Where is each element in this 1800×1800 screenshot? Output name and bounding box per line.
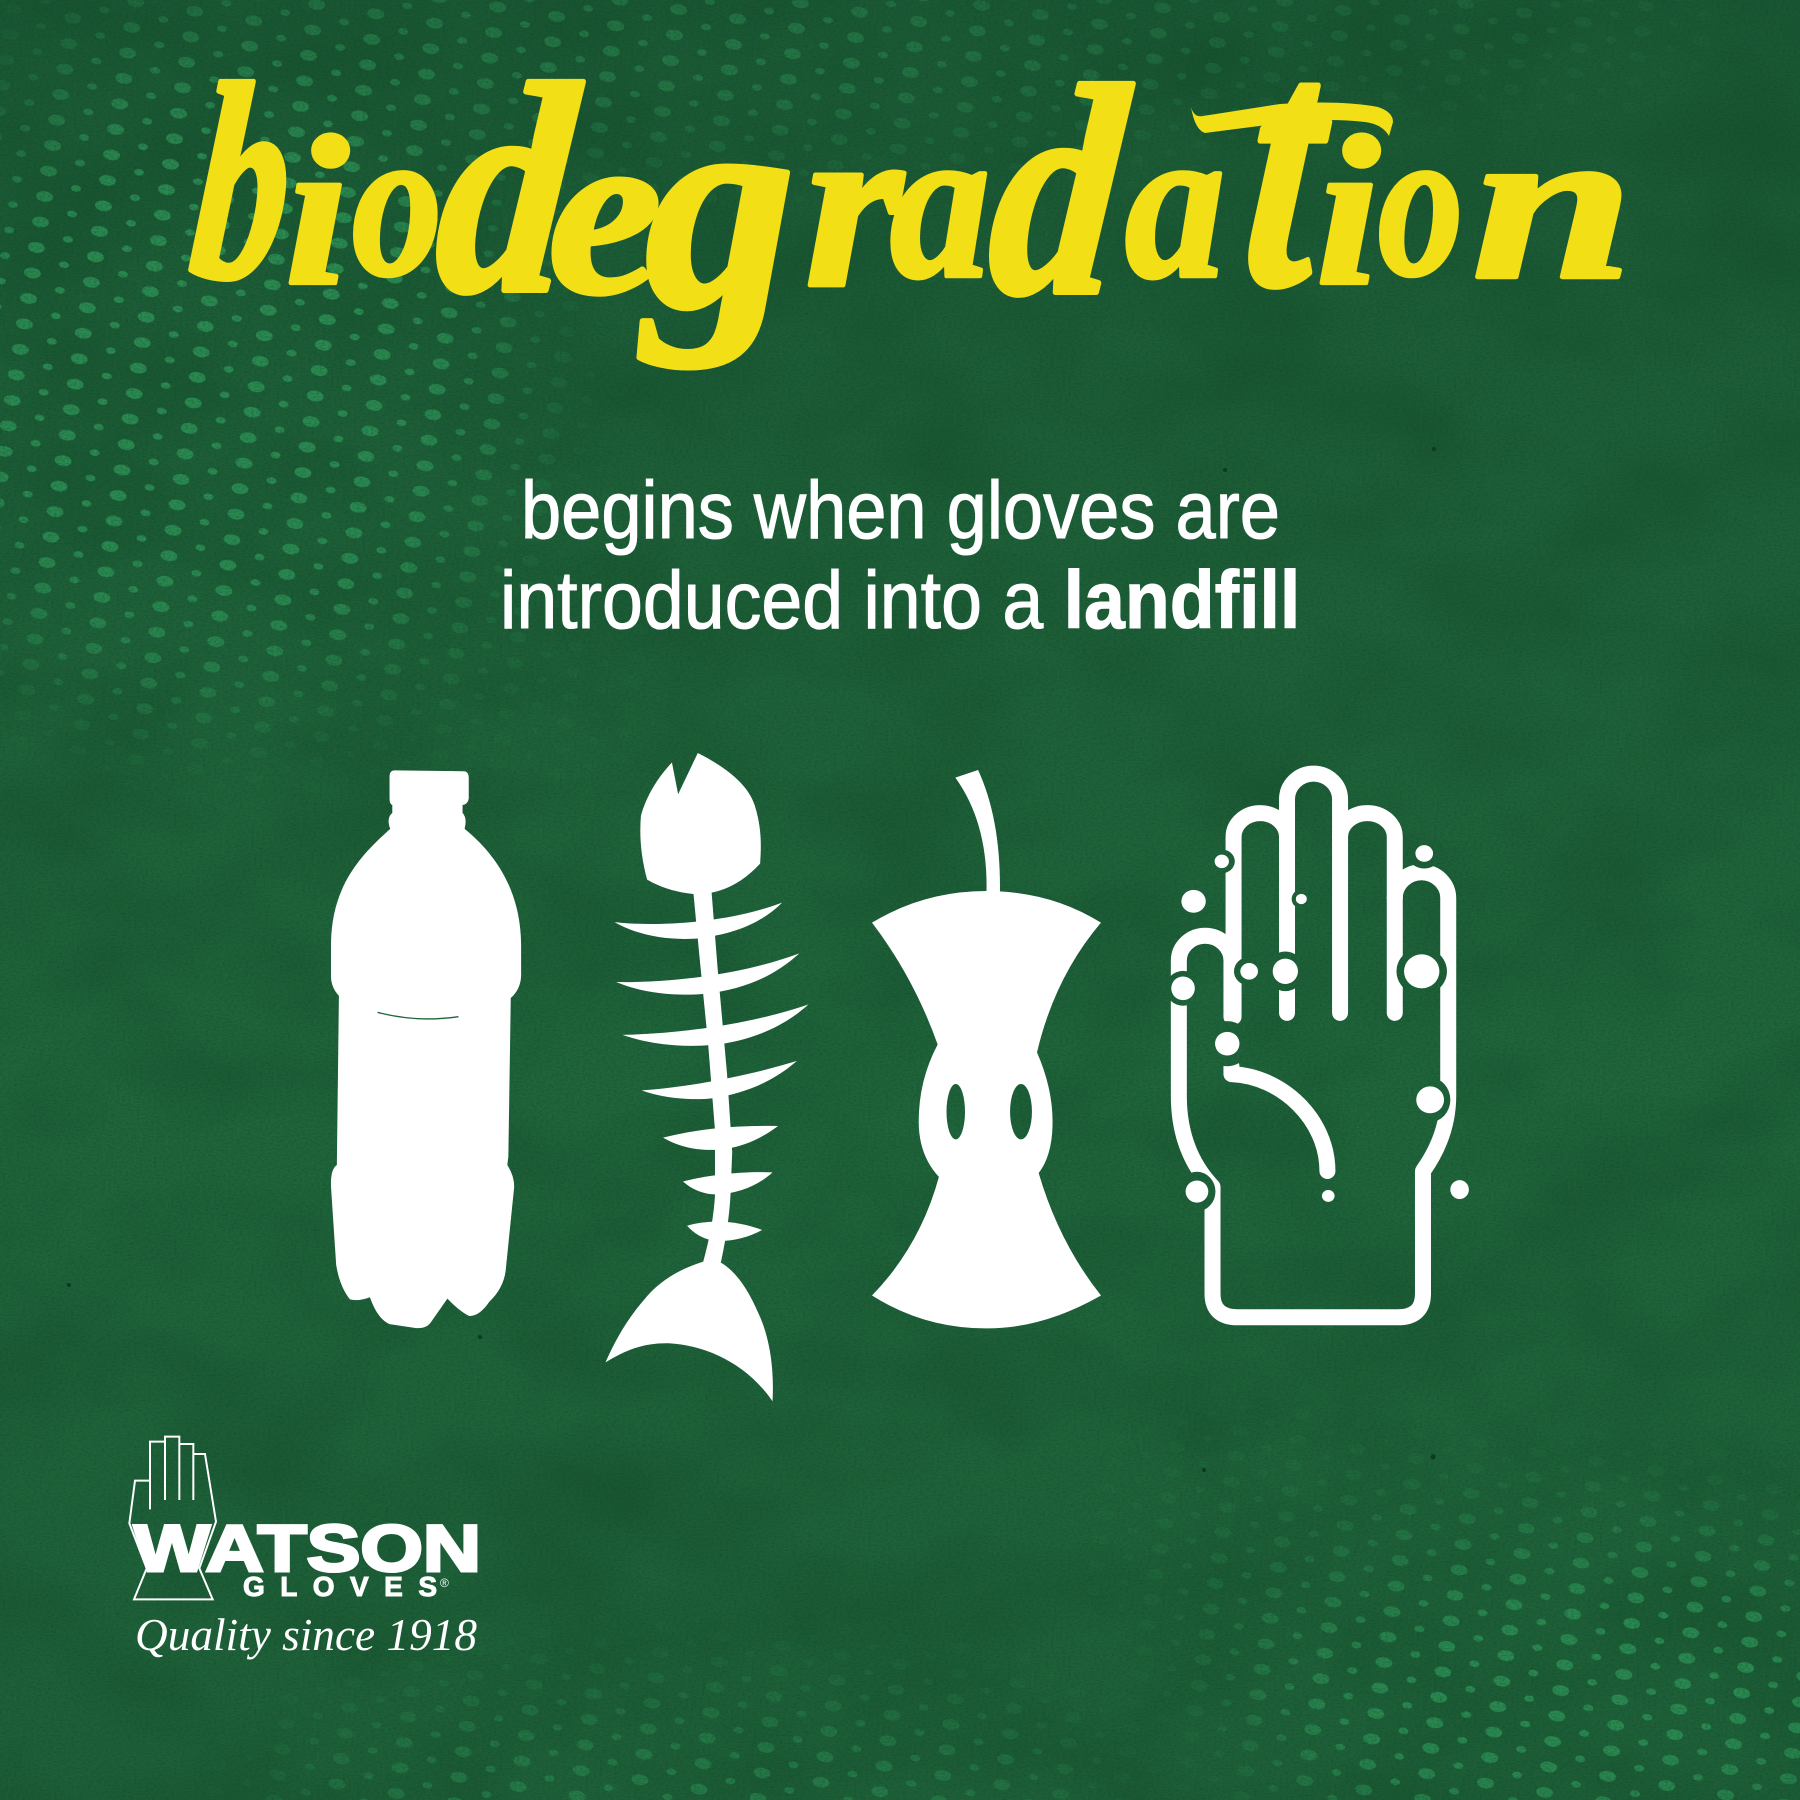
title: d bbox=[426, 22, 589, 355]
title: n bbox=[1472, 81, 1633, 325]
logo hand outline bbox=[129, 1437, 216, 1599]
title: e bbox=[548, 78, 662, 344]
icon: apple core bbox=[872, 770, 1101, 1328]
title: g bbox=[636, 44, 795, 369]
title: b bbox=[182, 26, 304, 337]
title: i bbox=[1316, 93, 1380, 330]
title: o bbox=[1378, 83, 1463, 322]
title: o bbox=[352, 83, 442, 322]
title bbox=[182, 0, 1633, 369]
logo: Watson Gloves bbox=[129, 1437, 481, 1660]
icon: fish skeleton bbox=[605, 753, 808, 1401]
subtitle line 2: introduced into a landfill bbox=[500, 555, 1300, 646]
title: a bbox=[890, 81, 990, 324]
logo wordmark: WATSON bbox=[134, 1511, 481, 1585]
subtitle bbox=[500, 465, 1300, 646]
title: i bbox=[285, 93, 349, 330]
title: a bbox=[1125, 81, 1225, 324]
subtitle line 1: begins when gloves are bbox=[521, 465, 1280, 556]
registered mark: ® bbox=[440, 1576, 449, 1590]
tagline: Quality since 1918 bbox=[135, 1609, 477, 1660]
icon: degrading glove bbox=[1171, 774, 1469, 1317]
logo subword: GLOVES bbox=[243, 1571, 437, 1602]
title: r bbox=[805, 72, 905, 338]
title: d bbox=[979, 26, 1139, 358]
icon: plastic bottle bbox=[331, 770, 521, 1328]
